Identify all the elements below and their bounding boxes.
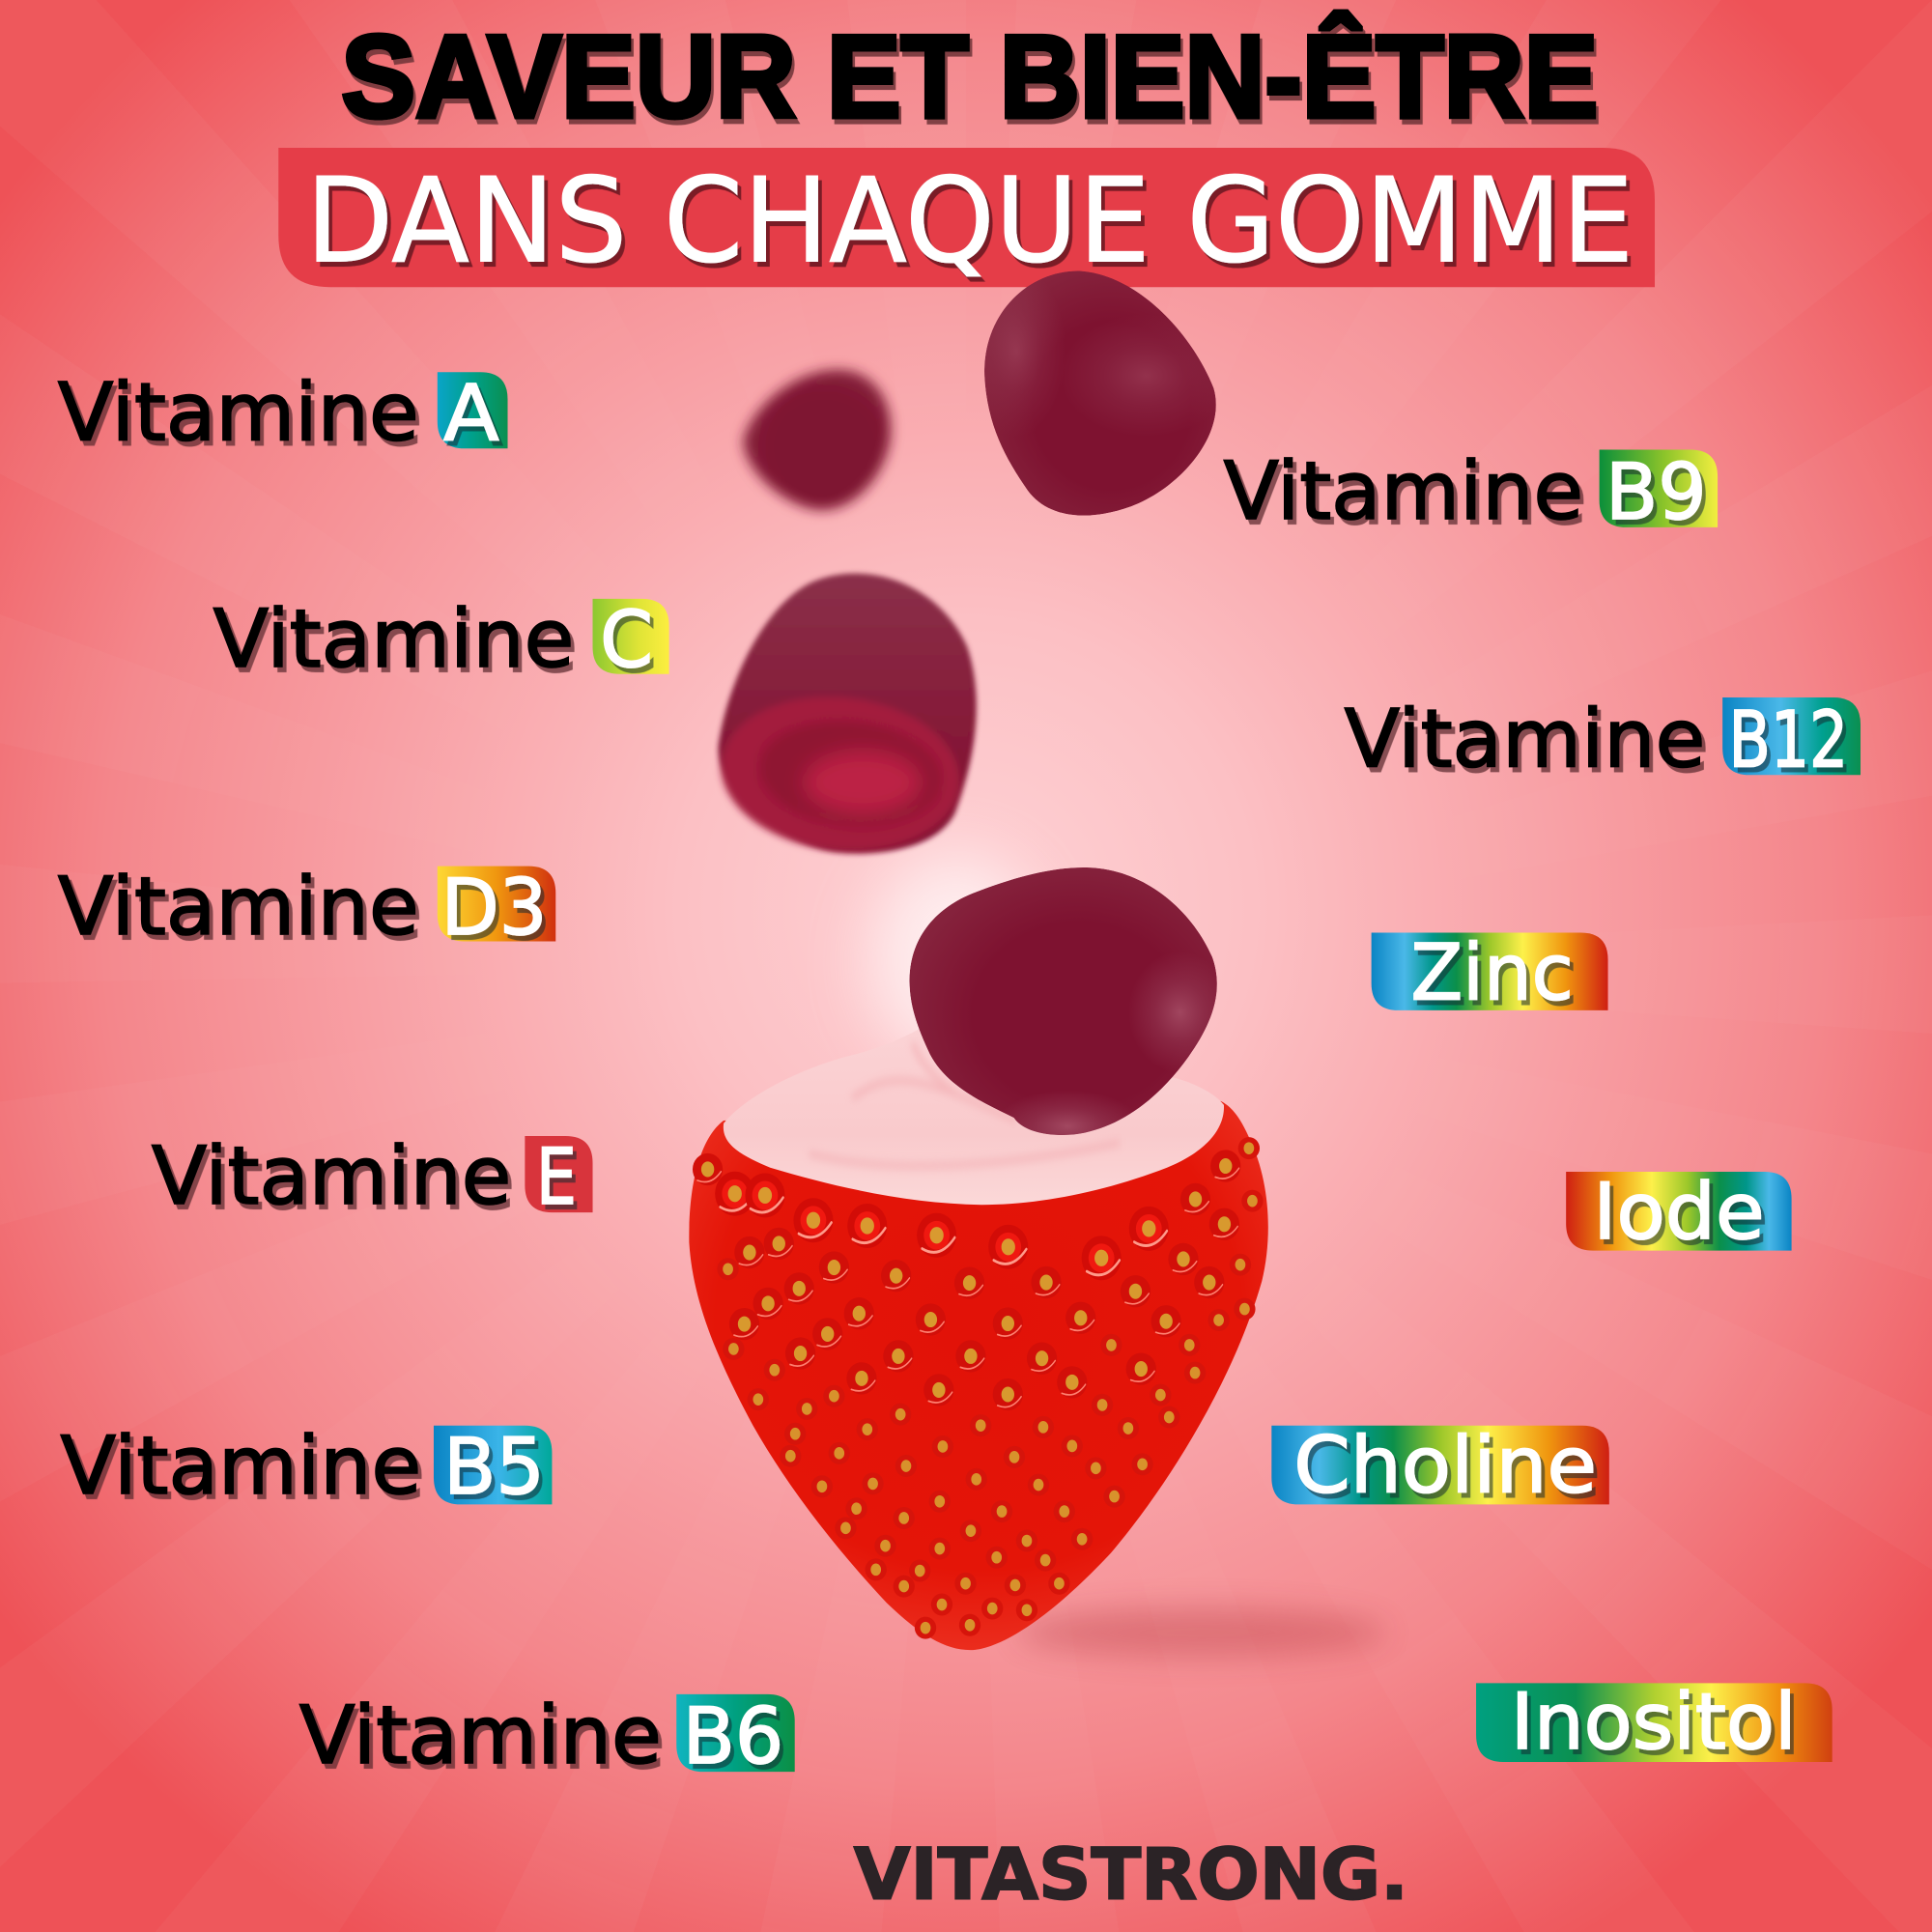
label: Choline: Choline xyxy=(1293,1420,1597,1511)
gummy: resting on cream xyxy=(910,867,1217,1135)
strawberry body xyxy=(689,1101,1268,1650)
label: Vitamine B9: B9 xyxy=(1605,446,1707,537)
cream topping xyxy=(724,1029,1224,1205)
label: Vitamine B5: B5 xyxy=(443,1421,545,1512)
label: Vitamine E: E xyxy=(536,1131,577,1222)
cream swirl shading xyxy=(810,1043,1120,1166)
subtitle banner: DANS CHAQUE GOMME: DANS CHAQUE GOMME xyxy=(305,153,1634,289)
label: Vitamine B9: Vitamine xyxy=(1224,444,1583,538)
label: Vitamine B12: B12 xyxy=(1729,694,1848,784)
title: SAVEUR ET BIEN-ÊTRE: SAVEUR ET BIEN-ÊTRE xyxy=(341,11,1598,142)
shadow beneath strawberry xyxy=(1016,1608,1386,1658)
label: Vitamine A: A xyxy=(443,367,499,458)
label: Vitamine B12 xyxy=(1345,692,1861,785)
label: Vitamine B6: B6 xyxy=(683,1690,783,1781)
glow behind gummy xyxy=(868,856,1041,1065)
gummy: top right xyxy=(984,270,1216,516)
label: Iode: Iode xyxy=(1593,1166,1765,1257)
strawberry seeds xyxy=(693,1137,1264,1639)
gummy: small blurred xyxy=(743,370,891,510)
label: Inositol: Inositol xyxy=(1511,1676,1797,1767)
label: Vitamine B12: Vitamine xyxy=(1345,692,1705,785)
gummy: centre, cylinder seen from below xyxy=(714,574,977,863)
label: Vitamine B6: Vitamine xyxy=(299,1689,662,1782)
logo: VITASTRONG.: VITASTRONG. xyxy=(854,1835,1408,1917)
label: Vitamine C: C xyxy=(600,594,653,685)
label: Zinc: Zinc xyxy=(1410,926,1574,1017)
label: Vitamine E: Vitamine xyxy=(152,1129,511,1223)
label: Vitamine B5: Vitamine xyxy=(60,1419,421,1513)
label: Vitamine A: Vitamine xyxy=(58,365,419,459)
label: Vitamine C: Vitamine xyxy=(213,592,574,686)
label: Vitamine D3: D3 xyxy=(441,862,547,952)
strawberry xyxy=(689,867,1268,1650)
label: Vitamine D3: Vitamine xyxy=(58,860,419,953)
